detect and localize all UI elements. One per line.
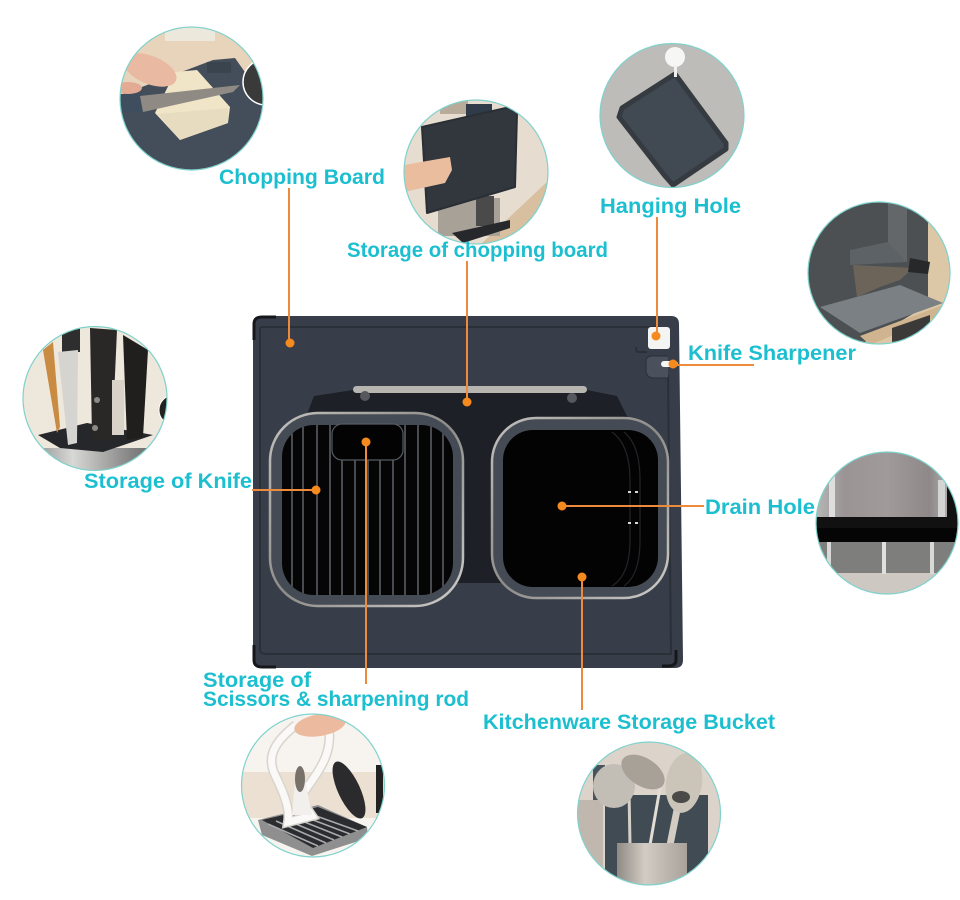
callout: drain hole [558, 495, 815, 519]
photo: knife sharpener close-up [808, 202, 952, 345]
callout: knife sharpener: Knife Sharpener [688, 341, 857, 365]
photo: scissors in the holder [241, 710, 385, 859]
callout: kitchenware storage bucket [483, 572, 775, 734]
callout: storage of chopping board: Storage of chopping board [347, 238, 608, 262]
photo: utensils in the storage bucket [577, 741, 722, 888]
callout: storage of knife: Storage of Knife [84, 469, 252, 493]
storage slot for boards [307, 386, 630, 583]
photo: knives stored in the rack [24, 327, 166, 470]
callout: drain hole: Drain Hole [705, 495, 815, 519]
callout: storage of scissors and sharpening rod [203, 438, 469, 711]
callout: chopping board: Chopping Board [219, 165, 385, 189]
chopping board body [253, 316, 683, 668]
photo: chopping tofu on the board [120, 28, 262, 170]
callout: storage of scissors and sharpening rod: Storage of [203, 668, 312, 692]
callout: kitchenware storage bucket: Kitchenware Storage Bucket [483, 710, 775, 734]
callout: hanging hole [600, 194, 741, 340]
photo: board hanging on a wall hook [600, 43, 745, 188]
callout: storage of knife [84, 469, 320, 494]
right bucket: kitchenware storage [492, 418, 668, 598]
photo: water draining from the bucket [816, 452, 960, 595]
callout: hanging hole: Hanging Hole [600, 194, 741, 218]
hanging hole [648, 327, 670, 349]
knife sharpener slot [646, 356, 678, 378]
left bucket: knife storage [270, 413, 463, 606]
photo: board stored on the stand [404, 100, 549, 245]
callout: chopping board [219, 165, 385, 348]
product: top view of chopping board with buckets [253, 316, 683, 668]
callout: storage of scissors and sharpening rod: Scissors & sharpening rod [203, 687, 469, 711]
callout: storage of chopping board [347, 238, 608, 406]
